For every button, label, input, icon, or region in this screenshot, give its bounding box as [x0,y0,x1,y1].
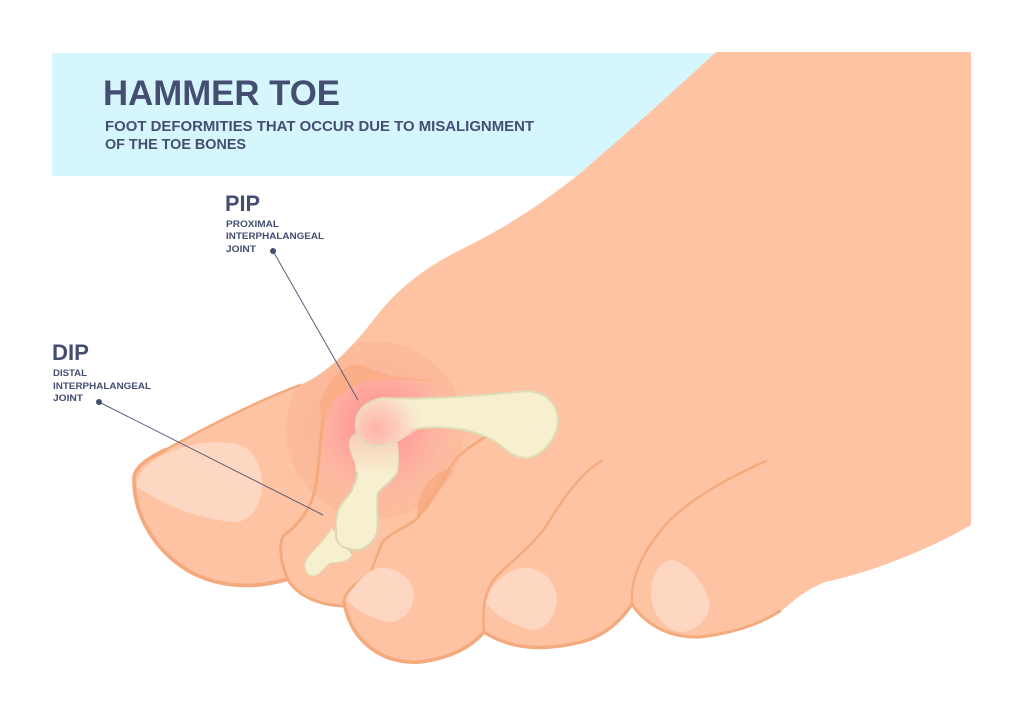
fourth toe outline [483,461,601,632]
toenail: third toe [347,568,414,622]
middle bone head tint [350,433,398,475]
fourth toe bottom [484,604,632,648]
fifth toe bottom [632,604,780,637]
toenail: fourth toe [486,568,557,630]
big toe outline [134,450,288,585]
joint redness [357,398,421,445]
DIP label [52,340,151,404]
swelling redness [318,379,470,524]
foot illustration [134,52,971,662]
subtitle [105,119,534,153]
title: HAMMER TOE [103,74,340,113]
toenail: fifth toe [651,560,710,632]
fifth toe outline [632,461,766,604]
DIP leader line [96,399,323,515]
header banner [52,53,732,176]
third toe inner edge [344,436,487,600]
bones [305,391,558,576]
PIP label [225,191,324,255]
subtitle: FOOT DEFORMITIES THAT OCCUR DUE TO MISALIGNMENT [105,119,534,135]
third toe outline [344,602,484,662]
toe outlines [134,385,780,662]
PIP label: PROXIMAL [226,219,279,230]
PIP label: INTERPHALANGEAL [226,231,324,242]
PIP label: PIP [225,191,260,216]
DIP label: DIP [52,340,89,365]
distal bone [305,528,352,576]
toenail: big toe [137,442,262,522]
big toe top edge [165,385,300,450]
DIP label: DISTAL [53,368,87,379]
second toe outline [281,420,344,606]
PIP label: JOINT [226,244,256,255]
subtitle: OF THE TOE BONES [105,137,246,153]
lower crease [417,470,453,519]
foot silhouette [134,52,971,662]
middle bone [336,433,398,550]
bump crease [320,365,437,428]
swelling halo [293,344,454,492]
PIP leader line [270,248,358,400]
DIP label: JOINT [53,393,83,404]
DIP label: INTERPHALANGEAL [53,381,151,392]
proximal bone [356,391,558,458]
